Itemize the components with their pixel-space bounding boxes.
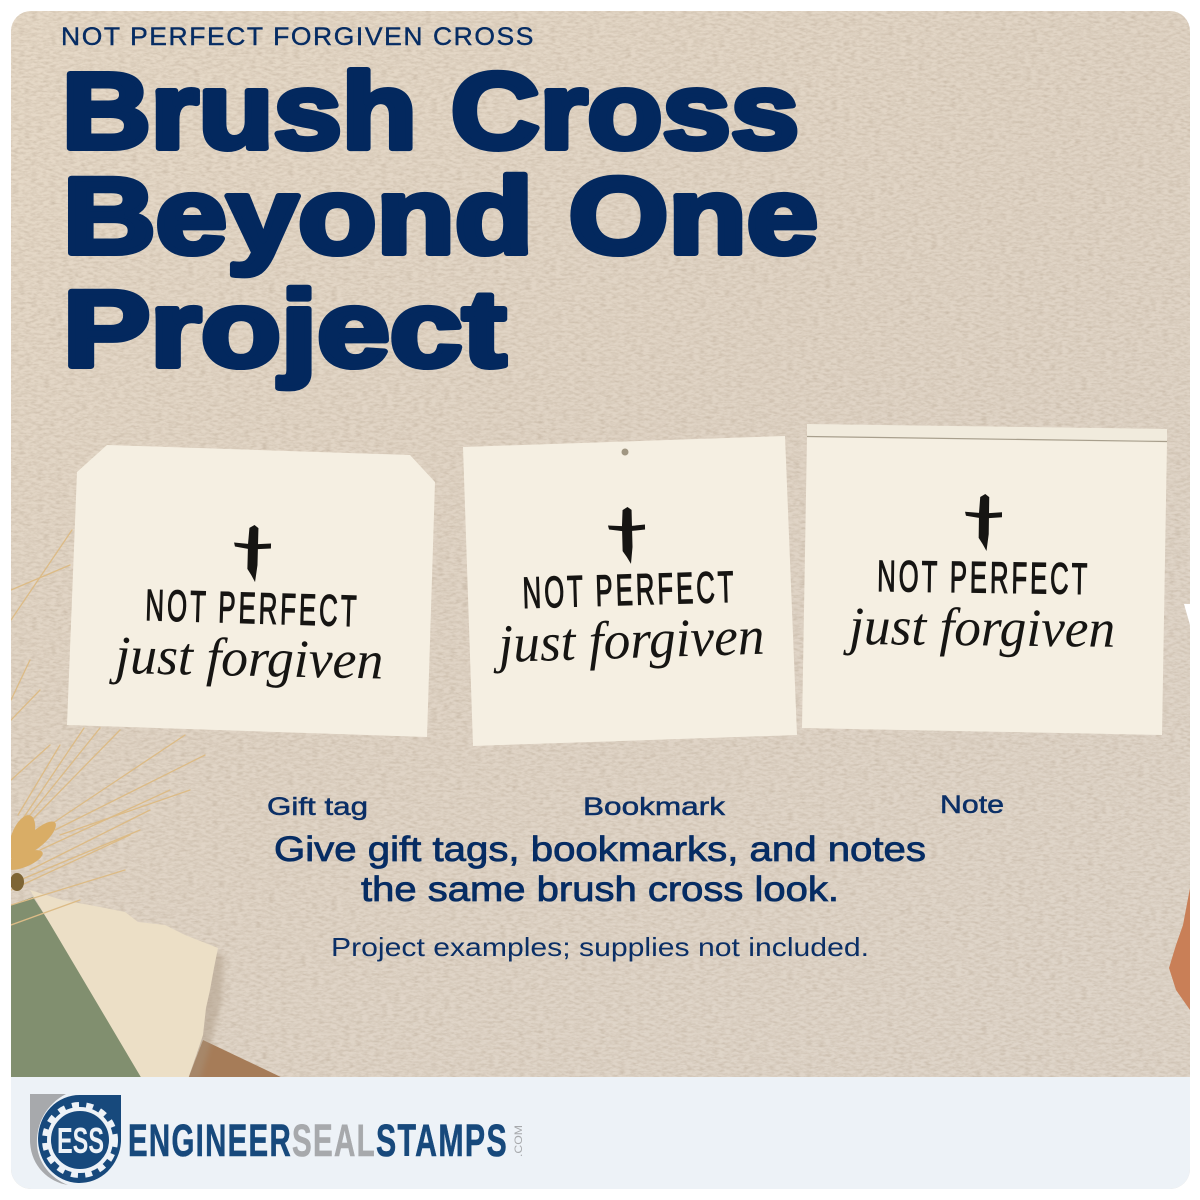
just forgiven script: just forgiven bbox=[843, 596, 1115, 659]
wheat stalk awns bbox=[11, 530, 205, 925]
logo grey swoosh bbox=[30, 1094, 68, 1185]
main title: Beyond One bbox=[63, 155, 818, 276]
eyebrow text: NOT PERFECT FORGIVEN CROSS bbox=[61, 23, 535, 51]
footer bar bbox=[11, 1077, 1190, 1189]
just forgiven script: just forgiven bbox=[109, 625, 384, 691]
white notch at right edge bbox=[1184, 604, 1190, 625]
brush cross icon bbox=[233, 525, 272, 582]
cream torn paper bbox=[30, 890, 218, 1079]
brown paper scrap bbox=[189, 1040, 280, 1077]
logo: Engineer Seal Stamps bbox=[30, 1094, 525, 1185]
main title bbox=[62, 50, 818, 389]
note top flap bbox=[807, 424, 1167, 443]
gift tag paper bbox=[67, 445, 435, 737]
logo blue seal bbox=[38, 1095, 121, 1183]
terracotta fabric bbox=[1169, 888, 1190, 1010]
main title: Brush Cross bbox=[62, 50, 799, 171]
supporting statement bbox=[274, 830, 926, 909]
brush cross icon bbox=[607, 507, 646, 564]
NOT PERFECT text: NOT PERFECT bbox=[145, 581, 360, 636]
shadow under torn paper bbox=[189, 952, 226, 1077]
bookmark punch hole bbox=[622, 448, 628, 456]
bookmark paper bbox=[463, 436, 797, 746]
flap fold line bbox=[807, 436, 1167, 442]
logo gear ring bbox=[45, 1105, 115, 1175]
logo .COM: .COM bbox=[513, 1125, 525, 1157]
decoration: paper scraps and wheat bbox=[3, 530, 1190, 1079]
main title: Project bbox=[63, 268, 506, 389]
wheat kernels bbox=[11, 815, 56, 891]
panel: gift tag bbox=[67, 445, 435, 737]
just forgiven script: just forgiven bbox=[492, 606, 765, 674]
supporting statement: Give gift tags, bookmarks, and notes bbox=[274, 830, 926, 869]
panel: bookmark bbox=[463, 436, 797, 746]
label: note: Note bbox=[940, 791, 1004, 819]
brush cross icon bbox=[964, 494, 1002, 551]
logo wordmark: STAMPS bbox=[376, 1115, 508, 1166]
note paper bbox=[802, 436, 1167, 735]
panel: note bbox=[802, 424, 1167, 735]
logo wordmark: ENGINEER bbox=[128, 1115, 292, 1166]
green paper scrap bbox=[11, 897, 150, 1079]
disclaimer note: Project examples; supplies not included. bbox=[331, 932, 869, 962]
NOT PERFECT text: NOT PERFECT bbox=[522, 563, 737, 618]
label: bookmark: Bookmark bbox=[583, 793, 726, 821]
logo ESS letters: ESS bbox=[57, 1120, 104, 1161]
logo wordmark: SEAL bbox=[292, 1115, 376, 1166]
label: gift tag: Gift tag bbox=[267, 793, 368, 821]
supporting statement: the same brush cross look. bbox=[361, 870, 839, 909]
